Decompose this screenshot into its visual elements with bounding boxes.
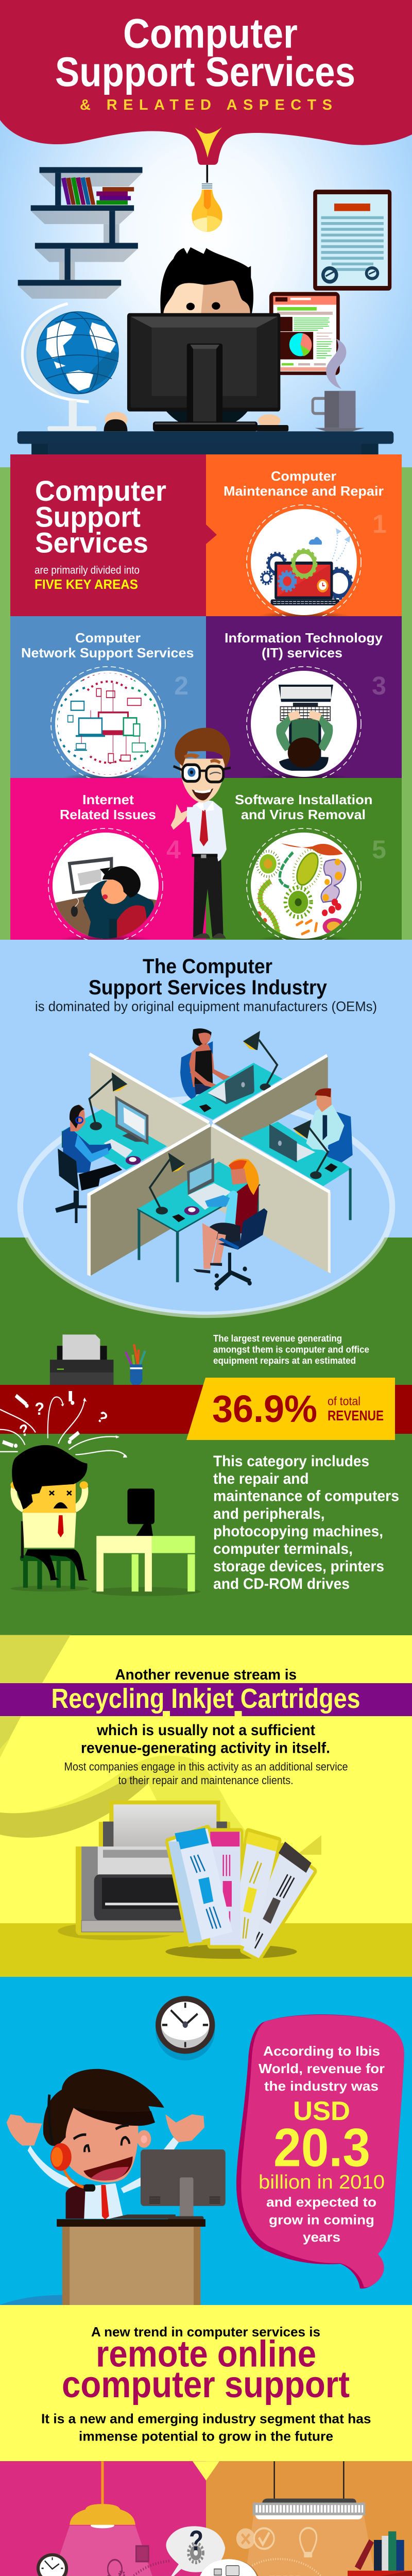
text: new trend: A new trend in computer services is — [91, 2324, 320, 2340]
panel title: Computer — [271, 468, 336, 484]
scene: problem desk and support agent — [0, 2461, 412, 2576]
title text: Computer — [123, 10, 298, 57]
icon: person at keyboard from above — [247, 667, 361, 783]
text: largest revenue generating: The largest revenue generating — [213, 1333, 342, 1344]
body text: category includes: maintenance of computers — [213, 1488, 399, 1504]
panel: information technology services — [206, 616, 402, 783]
left lamp and light cone — [16, 2461, 189, 2576]
panel: computer network support services — [10, 616, 206, 783]
front walls — [87, 1054, 331, 1276]
back walls — [91, 1055, 328, 1148]
text: largest revenue generating: amongst them is computer and office — [213, 1344, 369, 1355]
illustration: stressed worker at desk: ? — [94, 1408, 110, 1428]
body text: category includes: storage devices, printers — [213, 1558, 384, 1575]
text: additional service: Most companies engage in this activity as an additional service — [64, 1760, 348, 1773]
number 5: 5 — [372, 835, 386, 864]
callout: revenue speech bubble: billion in 2010 — [259, 2172, 385, 2193]
number 1: 1 — [372, 510, 387, 538]
section: industry revenue — [0, 1977, 412, 2305]
text: emerging segment: immense potential to grow in the future — [79, 2429, 333, 2444]
subtitle: & RELATED ASPECTS — [80, 97, 332, 113]
illustration: printer and ink cartridges — [58, 1801, 314, 1959]
callout: revenue speech bubble: and expected to — [266, 2194, 376, 2210]
icon: pink wall clock — [37, 2553, 68, 2576]
section: remote online computer support — [0, 2305, 412, 2576]
body text: category includes: and peripherals, — [213, 1505, 324, 1522]
callout: revenue speech bubble: USD — [293, 2096, 350, 2126]
section: computer support services industry — [0, 940, 412, 1635]
panel: computer maintenance and repair — [206, 454, 402, 621]
callout: revenue speech bubble: the industry was — [264, 2078, 379, 2094]
icon: dashboard tablet — [269, 292, 340, 375]
illustration: stressed worker at desk: ? — [35, 1399, 44, 1418]
section: recycling inkjet cartridges — [0, 1635, 412, 1977]
panel title line 2: and Virus Removal — [241, 807, 366, 822]
icon: printer — [50, 1334, 113, 1387]
icon: light bulb — [192, 165, 222, 232]
number 4: 4 — [166, 835, 181, 864]
callout: 36.9 percent of total revenue: 36.9% — [212, 1387, 317, 1430]
callout: revenue speech bubble — [236, 2014, 404, 2289]
right worker — [241, 1088, 353, 1220]
icons: faded check, cross and bulb — [236, 2528, 329, 2576]
heading: computer support: computer support — [62, 2364, 350, 2405]
panel: software installation and virus removal — [206, 778, 402, 945]
panel title line 2: Maintenance and Repair — [224, 483, 384, 499]
callout: revenue speech bubble: years — [303, 2229, 340, 2245]
icons: repair tools — [91, 2546, 171, 2576]
title banner — [0, 0, 412, 165]
heading line 2: Support — [35, 501, 141, 533]
title text line 2: Support Services — [55, 49, 355, 95]
right lamp and light cone — [231, 2461, 394, 2576]
panel title line 2: Related Issues — [60, 807, 156, 822]
panel title line 2: (IT) services — [262, 645, 342, 660]
section: hero with sky background — [0, 0, 412, 469]
text: additional service — [64, 1760, 348, 1787]
red stat band — [0, 1385, 412, 1434]
panel title: Internet — [82, 792, 134, 807]
panel: intro — [10, 454, 206, 616]
body text: category includes: photocopying machines, — [213, 1523, 383, 1540]
icon: wall shelves with books — [18, 167, 143, 299]
banner: recycling inkjet cartridges: Recycling Inkjet Cartridges — [52, 1683, 360, 1714]
illustration: stressed worker at desk — [0, 1391, 200, 1596]
callout: answer speech bubble — [198, 2559, 262, 2576]
heading line 3: Services — [35, 527, 148, 558]
icon: device network cloud — [49, 667, 167, 783]
callout: 36.9 percent of total revenue — [186, 1378, 395, 1440]
panel: internet related issues — [10, 778, 206, 945]
heading: remote online: remote online — [96, 2334, 316, 2375]
text: largest revenue generating: equipment repairs at an estimated — [213, 1355, 356, 1366]
body text: category includes: and CD-ROM drives — [213, 1575, 350, 1592]
icon: laptop and gears — [247, 505, 361, 621]
text: not sufficient: which is usually not a sufficient — [96, 1722, 315, 1739]
panel title: Computer — [75, 630, 141, 646]
subheading: oems: is dominated by original equipment manufacturers (OEMs) — [35, 998, 377, 1014]
illustration: stressed worker at desk: ? — [18, 1420, 30, 1440]
panel title: Information Technology — [225, 630, 383, 646]
callout: 36.9 percent of total revenue: of total — [328, 1394, 360, 1408]
text: emerging segment — [41, 2411, 371, 2444]
left worker — [55, 1072, 167, 1223]
icon: frustrated person at computer — [48, 828, 163, 945]
body text: category includes: This category includes — [213, 1453, 369, 1470]
body text: category includes — [213, 1453, 399, 1592]
callout: revenue speech bubble: According to Ibis — [263, 2043, 380, 2059]
section: five key areas panels — [0, 454, 412, 945]
callout: revenue speech bubble: 20.3 — [273, 2117, 370, 2178]
text: largest revenue generating — [213, 1333, 369, 1366]
top worker — [180, 1028, 282, 1120]
body text: category includes: the repair and — [213, 1470, 309, 1487]
character: man behind monitor — [104, 247, 288, 431]
panel title: Software Installation — [235, 792, 373, 807]
text: another revenue stream: Another revenue stream is — [115, 1667, 297, 1683]
icon: bacteria and viruses — [247, 828, 361, 945]
icon: coffee mug with steam — [313, 339, 365, 431]
front worker — [137, 1153, 267, 1291]
callout: question speech bubble — [166, 2526, 225, 2576]
heading: support services industry: Support Services Industry — [89, 976, 328, 999]
icon: certificate frame — [313, 190, 391, 291]
intro text: are primarily divided into — [35, 565, 140, 576]
number 2: 2 — [174, 671, 188, 700]
icon: wall clock — [156, 1996, 215, 2060]
icon: pencil cup — [126, 1344, 145, 1385]
question mark: ? — [189, 2524, 203, 2556]
panel title line 2: Network Support Services — [21, 645, 194, 660]
callout: revenue speech bubble: grow in coming — [269, 2212, 374, 2228]
callout: 36.9 percent of total revenue: REVENUE — [328, 1408, 384, 1423]
icon: globe — [22, 303, 118, 431]
icon: bookshelf — [348, 2531, 412, 2576]
text: not sufficient — [81, 1722, 330, 1757]
heading: the computer: The Computer — [143, 955, 272, 978]
illustration: four person office cubicles — [20, 1028, 392, 1315]
text: additional service: to their repair and maintenance clients. — [118, 1774, 294, 1787]
desk — [18, 431, 393, 460]
text: not sufficient: revenue-generating activity in itself. — [81, 1739, 330, 1757]
text: emerging segment: It is a new and emerging industry segment that has — [41, 2411, 371, 2427]
body text: category includes: computer terminals, — [213, 1540, 353, 1557]
number 3: 3 — [372, 671, 386, 700]
character: winking man with glasses giving thumbs up — [171, 728, 231, 939]
callout: revenue speech bubble: World, revenue for — [259, 2061, 385, 2076]
heading: computer support services: Computer — [35, 474, 166, 507]
five key areas: FIVE KEY AREAS — [35, 578, 138, 592]
character: happy support agent at desk — [0, 2069, 226, 2305]
